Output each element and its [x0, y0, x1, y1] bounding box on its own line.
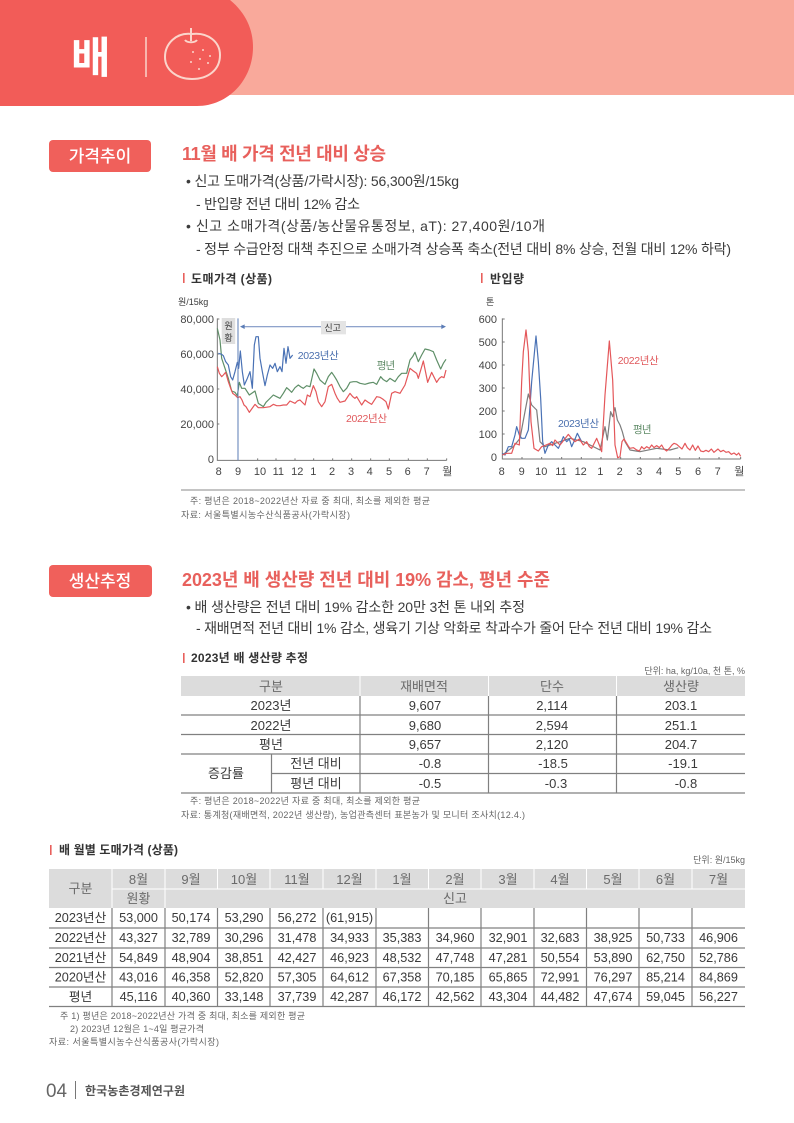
table: production estimate: -0.8	[419, 756, 441, 771]
table: monthly wholesale price: 42,287	[330, 990, 369, 1004]
table: monthly wholesale price: 2023년산	[55, 911, 107, 925]
table: production estimate: 204.7	[665, 737, 697, 752]
table: monthly wholesale price: 11월	[284, 872, 310, 887]
table: monthly wholesale price: 31,478	[278, 931, 316, 945]
table: monthly wholesale price: 2021년산	[55, 951, 107, 965]
line chart: arrivals: 400	[479, 360, 497, 372]
line chart: wholesale price: 7	[424, 466, 430, 478]
table: monthly wholesale price: 2020년산	[55, 970, 107, 984]
line chart: wholesale price: 20,000	[180, 419, 214, 431]
line chart: wholesale price: 2022년산	[346, 413, 387, 425]
table: monthly wholesale price: 8월	[129, 872, 148, 887]
table: production estimate: 2,594	[536, 718, 568, 733]
table: monthly wholesale price: 72,991	[541, 970, 579, 984]
table: production estimate: 203.1	[665, 698, 697, 713]
table: production estimate: -18.5	[538, 756, 568, 771]
table: monthly wholesale price: 53,890	[594, 951, 632, 965]
line chart: arrivals: 9	[519, 466, 525, 478]
table: monthly wholesale price: 46,906	[699, 931, 738, 945]
table: monthly wholesale price: 52,786	[699, 951, 738, 965]
source note: price section: 자료: 서울특별시농수산식품공사(가락시장)	[181, 509, 350, 520]
line chart: wholesale price: 6	[405, 466, 411, 478]
line chart: wholesale price: 원/15kg	[178, 297, 208, 307]
line chart: wholesale price: 평년	[377, 360, 395, 372]
line chart: arrivals: 100	[479, 429, 497, 441]
table: monthly wholesale price: 42,562	[436, 990, 474, 1004]
table: monthly wholesale price: 47,748	[436, 951, 474, 965]
line chart: arrivals: 2023년산	[558, 418, 599, 430]
table: monthly wholesale price: 32,901	[489, 931, 527, 945]
table: monthly wholesale price: 48,904	[172, 951, 210, 965]
table: production estimate: 2023년	[251, 698, 291, 713]
heading: price trend: 11월 배 가격 전년 대비 상승	[182, 144, 386, 164]
line chart: arrivals: 5	[675, 466, 681, 478]
line chart: arrivals: 6	[695, 466, 701, 478]
source note: monthly table: 주 1) 평년은 2018~2022년산 가격 중 최대, 최소를 제외한 평균	[60, 1010, 305, 1021]
table: monthly wholesale price: 45,116	[120, 990, 157, 1004]
line chart: arrivals: 3	[636, 466, 642, 478]
table: monthly wholesale price: 50,554	[541, 951, 579, 965]
table: production estimate: 구분	[259, 679, 283, 694]
badge: production estimate	[49, 565, 152, 597]
text block: price summary: • 신고 소매가격(상품/농산물유통정보, aT): 27,400원/10개	[186, 218, 545, 234]
table: monthly wholesale price: 48,532	[383, 951, 421, 965]
table: monthly wholesale price: 1월	[392, 872, 412, 887]
table: monthly wholesale price: 47,674	[594, 990, 632, 1004]
table: monthly wholesale price: 67,358	[383, 970, 421, 984]
table: monthly wholesale price: 6월	[656, 872, 675, 887]
table heading: production estimate: 2023년 배 생산량 추정	[191, 651, 308, 665]
table: production estimate: 평년	[259, 737, 283, 752]
line chart: arrivals: 500	[479, 337, 497, 349]
text block: production summary: • 배 생산량은 전년 대비 19% 감소한 20만 3천 톤 내외 추정	[186, 599, 525, 615]
table: monthly wholesale price: 5월	[603, 872, 623, 887]
line chart: arrivals: 8	[499, 466, 505, 478]
table: monthly wholesale price: 34,933	[330, 931, 369, 945]
table: monthly wholesale price: 4월	[550, 872, 570, 887]
table: monthly wholesale price: 56,227	[699, 990, 738, 1004]
table: monthly wholesale price: 53,290	[225, 911, 263, 925]
table: monthly wholesale price: 44,482	[541, 990, 579, 1004]
line chart: wholesale price: 60,000	[180, 349, 214, 361]
footer: 04	[46, 1080, 67, 1102]
table: production estimate: -0.5	[419, 776, 441, 791]
table: monthly wholesale price: 구분	[69, 881, 92, 896]
line chart: arrivals: 600	[479, 314, 497, 326]
line chart: wholesale price: 2	[329, 466, 335, 478]
table: monthly wholesale price: 2월	[445, 872, 465, 887]
table: production estimate: 전년 대비	[290, 756, 342, 771]
table: production estimate: 재배면적	[400, 679, 448, 694]
table: monthly wholesale price: 43,016	[119, 970, 158, 984]
line chart: arrivals: 11	[555, 466, 567, 478]
table: production estimate: 2,114	[536, 698, 568, 713]
table: monthly wholesale price: 3월	[498, 872, 518, 887]
table: monthly wholesale price: 원황	[127, 891, 150, 906]
line chart: arrivals: 300	[479, 383, 497, 395]
line chart: wholesale price: 월	[442, 465, 452, 478]
table: monthly wholesale price: 52,820	[225, 970, 263, 984]
table: monthly wholesale price: 10월	[231, 872, 257, 887]
table: monthly wholesale price: 12월	[336, 872, 363, 887]
table: monthly wholesale price: 47,281	[489, 951, 527, 965]
line chart: arrivals	[479, 297, 744, 478]
line chart: wholesale price	[178, 297, 452, 478]
table: production estimate: 9,680	[409, 718, 441, 733]
line chart: wholesale price: 11	[273, 466, 284, 478]
line chart: wholesale price: 2023년산	[298, 350, 339, 362]
table heading: monthly wholesale price: 배 월별 도매가격 (상품)	[59, 842, 178, 857]
line chart: arrivals: 7	[715, 466, 721, 478]
table: production estimate: 평년 대비	[290, 776, 342, 791]
unit label: 단위: 원/15kg	[693, 855, 745, 865]
line chart: wholesale price: 0	[208, 454, 214, 466]
text block: price summary	[186, 173, 731, 257]
source note: production section: 자료: 통계청(재배면적, 2022년 생산량), 농업관측센터 표본농가 및 모니터 조사치(12.4.)	[181, 809, 525, 820]
table: monthly wholesale price: 50,733	[646, 931, 685, 945]
table: production estimate: 9,607	[409, 698, 441, 713]
line chart: wholesale price: 1	[310, 466, 316, 478]
header band	[0, 0, 794, 106]
table: monthly wholesale price: 34,960	[436, 931, 474, 945]
table: monthly wholesale price: 57,305	[278, 970, 316, 984]
footer	[46, 1080, 185, 1102]
line chart: arrivals: 200	[479, 406, 497, 418]
table: monthly wholesale price: 33,148	[225, 990, 263, 1004]
table: monthly wholesale price: 신고	[443, 891, 467, 906]
table: monthly wholesale price: 32,789	[172, 931, 210, 945]
page title: 배	[71, 35, 111, 83]
table: production estimate: 생산량	[663, 679, 699, 694]
table: monthly wholesale price: 46,358	[172, 970, 210, 984]
table: monthly wholesale price: 9월	[181, 872, 201, 887]
line chart: wholesale price: 황	[224, 333, 233, 343]
table: monthly wholesale price: 70,185	[436, 970, 474, 984]
chart heading: arrivals: 반입량	[490, 272, 524, 286]
table: production estimate: 9,657	[409, 737, 441, 752]
table: monthly wholesale price: 76,297	[594, 970, 632, 984]
line chart: arrivals: 4	[656, 466, 662, 478]
table: production estimate: 단수	[540, 679, 564, 694]
table: production estimate: -19.1	[668, 756, 698, 771]
line chart: arrivals: 2022년산	[618, 355, 659, 367]
line chart: wholesale price: 4	[367, 466, 373, 478]
table: monthly wholesale price: 7월	[709, 872, 728, 887]
table: monthly wholesale price: 37,739	[278, 990, 316, 1004]
source note: monthly table: 자료: 서울특별시농수산식품공사(가락시장)	[49, 1036, 219, 1047]
line chart: arrivals: 평년	[633, 424, 652, 436]
table: monthly wholesale price: 65,865	[489, 970, 527, 984]
source note: production section	[181, 795, 525, 820]
table: monthly wholesale price: 2022년산	[55, 931, 107, 945]
line chart: wholesale price: 10	[254, 466, 266, 478]
table: monthly wholesale price: 46,923	[330, 951, 369, 965]
table: monthly wholesale price	[49, 869, 745, 1006]
table: monthly wholesale price: 43,327	[119, 931, 158, 945]
table: production estimate: 251.1	[665, 718, 697, 733]
table: monthly wholesale price: 46,172	[383, 990, 421, 1004]
table: monthly wholesale price: 42,427	[278, 951, 316, 965]
line chart: arrivals: 1	[597, 466, 603, 478]
badge: price trend	[49, 140, 151, 172]
text block: production summary	[186, 599, 712, 636]
source note: monthly table: 2) 2023년 12월은 1~4일 평균가격	[70, 1023, 204, 1034]
line chart: wholesale price: 원	[224, 321, 233, 331]
source note: price section	[181, 495, 430, 520]
table: monthly wholesale price: 평년	[69, 990, 92, 1004]
source note: price section: 주: 평년은 2018~2022년산 자료 중 최대, 최소를 제외한 평균	[190, 495, 430, 506]
line chart: wholesale price: 신고	[324, 323, 341, 333]
table: production estimate: -0.8	[675, 776, 697, 791]
table: production estimate: 증감률	[208, 766, 244, 781]
line chart: arrivals: 0	[491, 452, 497, 464]
table: monthly wholesale price: 53,000	[119, 911, 158, 925]
line chart: arrivals: 12	[575, 466, 587, 478]
table: monthly wholesale price: 56,272	[278, 911, 316, 925]
table: monthly wholesale price: 40,360	[172, 990, 210, 1004]
table: monthly wholesale price: 54,849	[119, 951, 158, 965]
line chart: wholesale price: 9	[235, 466, 241, 478]
line chart: wholesale price: 12	[291, 466, 303, 478]
footer: 한국농촌경제연구원	[85, 1083, 185, 1098]
text block: price summary: • 신고 도매가격(상품/가락시장): 56,300원/15kg	[186, 173, 459, 189]
source note: monthly table	[49, 1010, 305, 1047]
line chart: arrivals: 톤	[486, 297, 494, 307]
table: monthly wholesale price: 38,851	[225, 951, 263, 965]
table: monthly wholesale price: 50,174	[172, 911, 210, 925]
line chart: arrivals: 2	[617, 466, 623, 478]
table: production estimate	[181, 676, 745, 793]
line chart: wholesale price: 80,000	[180, 314, 214, 326]
line chart: arrivals: 월	[734, 465, 744, 478]
badge: price trend: 가격추이	[69, 147, 131, 166]
table: monthly wholesale price: 84,869	[699, 970, 738, 984]
table: production estimate: 2,120	[536, 737, 568, 752]
table: monthly wholesale price: (61,915)	[326, 911, 373, 925]
unit label: 단위: ha, kg/10a, 천 톤, %	[644, 666, 745, 676]
table: monthly wholesale price: 32,683	[541, 931, 579, 945]
table: monthly wholesale price: 59,045	[646, 990, 685, 1004]
heading: production estimate: 2023년 배 생산량 전년 대비 19% 감소, 평년 수준	[182, 570, 550, 590]
table: monthly wholesale price: 43,304	[489, 990, 527, 1004]
text block: price summary: - 반입량 전년 대비 12% 감소	[196, 196, 360, 212]
table: monthly wholesale price: 85,214	[646, 970, 685, 984]
text block: price summary: - 정부 수급안정 대책 추진으로 소매가격 상승폭 축소(전년 대비 8% 상승, 전월 대비 12% 하락)	[196, 241, 731, 257]
line chart: wholesale price: 5	[386, 466, 392, 478]
text block: production summary: - 재배면적 전년 대비 1% 감소, 생육기 기상 악화로 착과수가 줄어 단수 전년 대비 19% 감소	[196, 620, 712, 636]
table: monthly wholesale price: 30,296	[225, 931, 263, 945]
table: monthly wholesale price: 64,612	[330, 970, 369, 984]
badge: production estimate: 생산추정	[69, 572, 131, 591]
line chart: wholesale price: 3	[348, 466, 354, 478]
line chart: wholesale price: 40,000	[180, 384, 214, 396]
table: monthly wholesale price: 38,925	[594, 931, 632, 945]
table: production estimate: 2022년	[251, 718, 291, 733]
icon: pear	[146, 28, 220, 79]
source note: production section: 주: 평년은 2018~2022년 자료 중 최대, 최소를 제외한 평균	[190, 795, 420, 806]
table: production estimate: -0.3	[545, 776, 567, 791]
table: monthly wholesale price: 35,383	[383, 931, 421, 945]
chart heading: wholesale price: 도매가격 (상품)	[191, 271, 272, 286]
line chart: wholesale price: 8	[216, 466, 222, 478]
table: monthly wholesale price: 62,750	[646, 951, 685, 965]
line chart: arrivals: 10	[535, 466, 547, 478]
